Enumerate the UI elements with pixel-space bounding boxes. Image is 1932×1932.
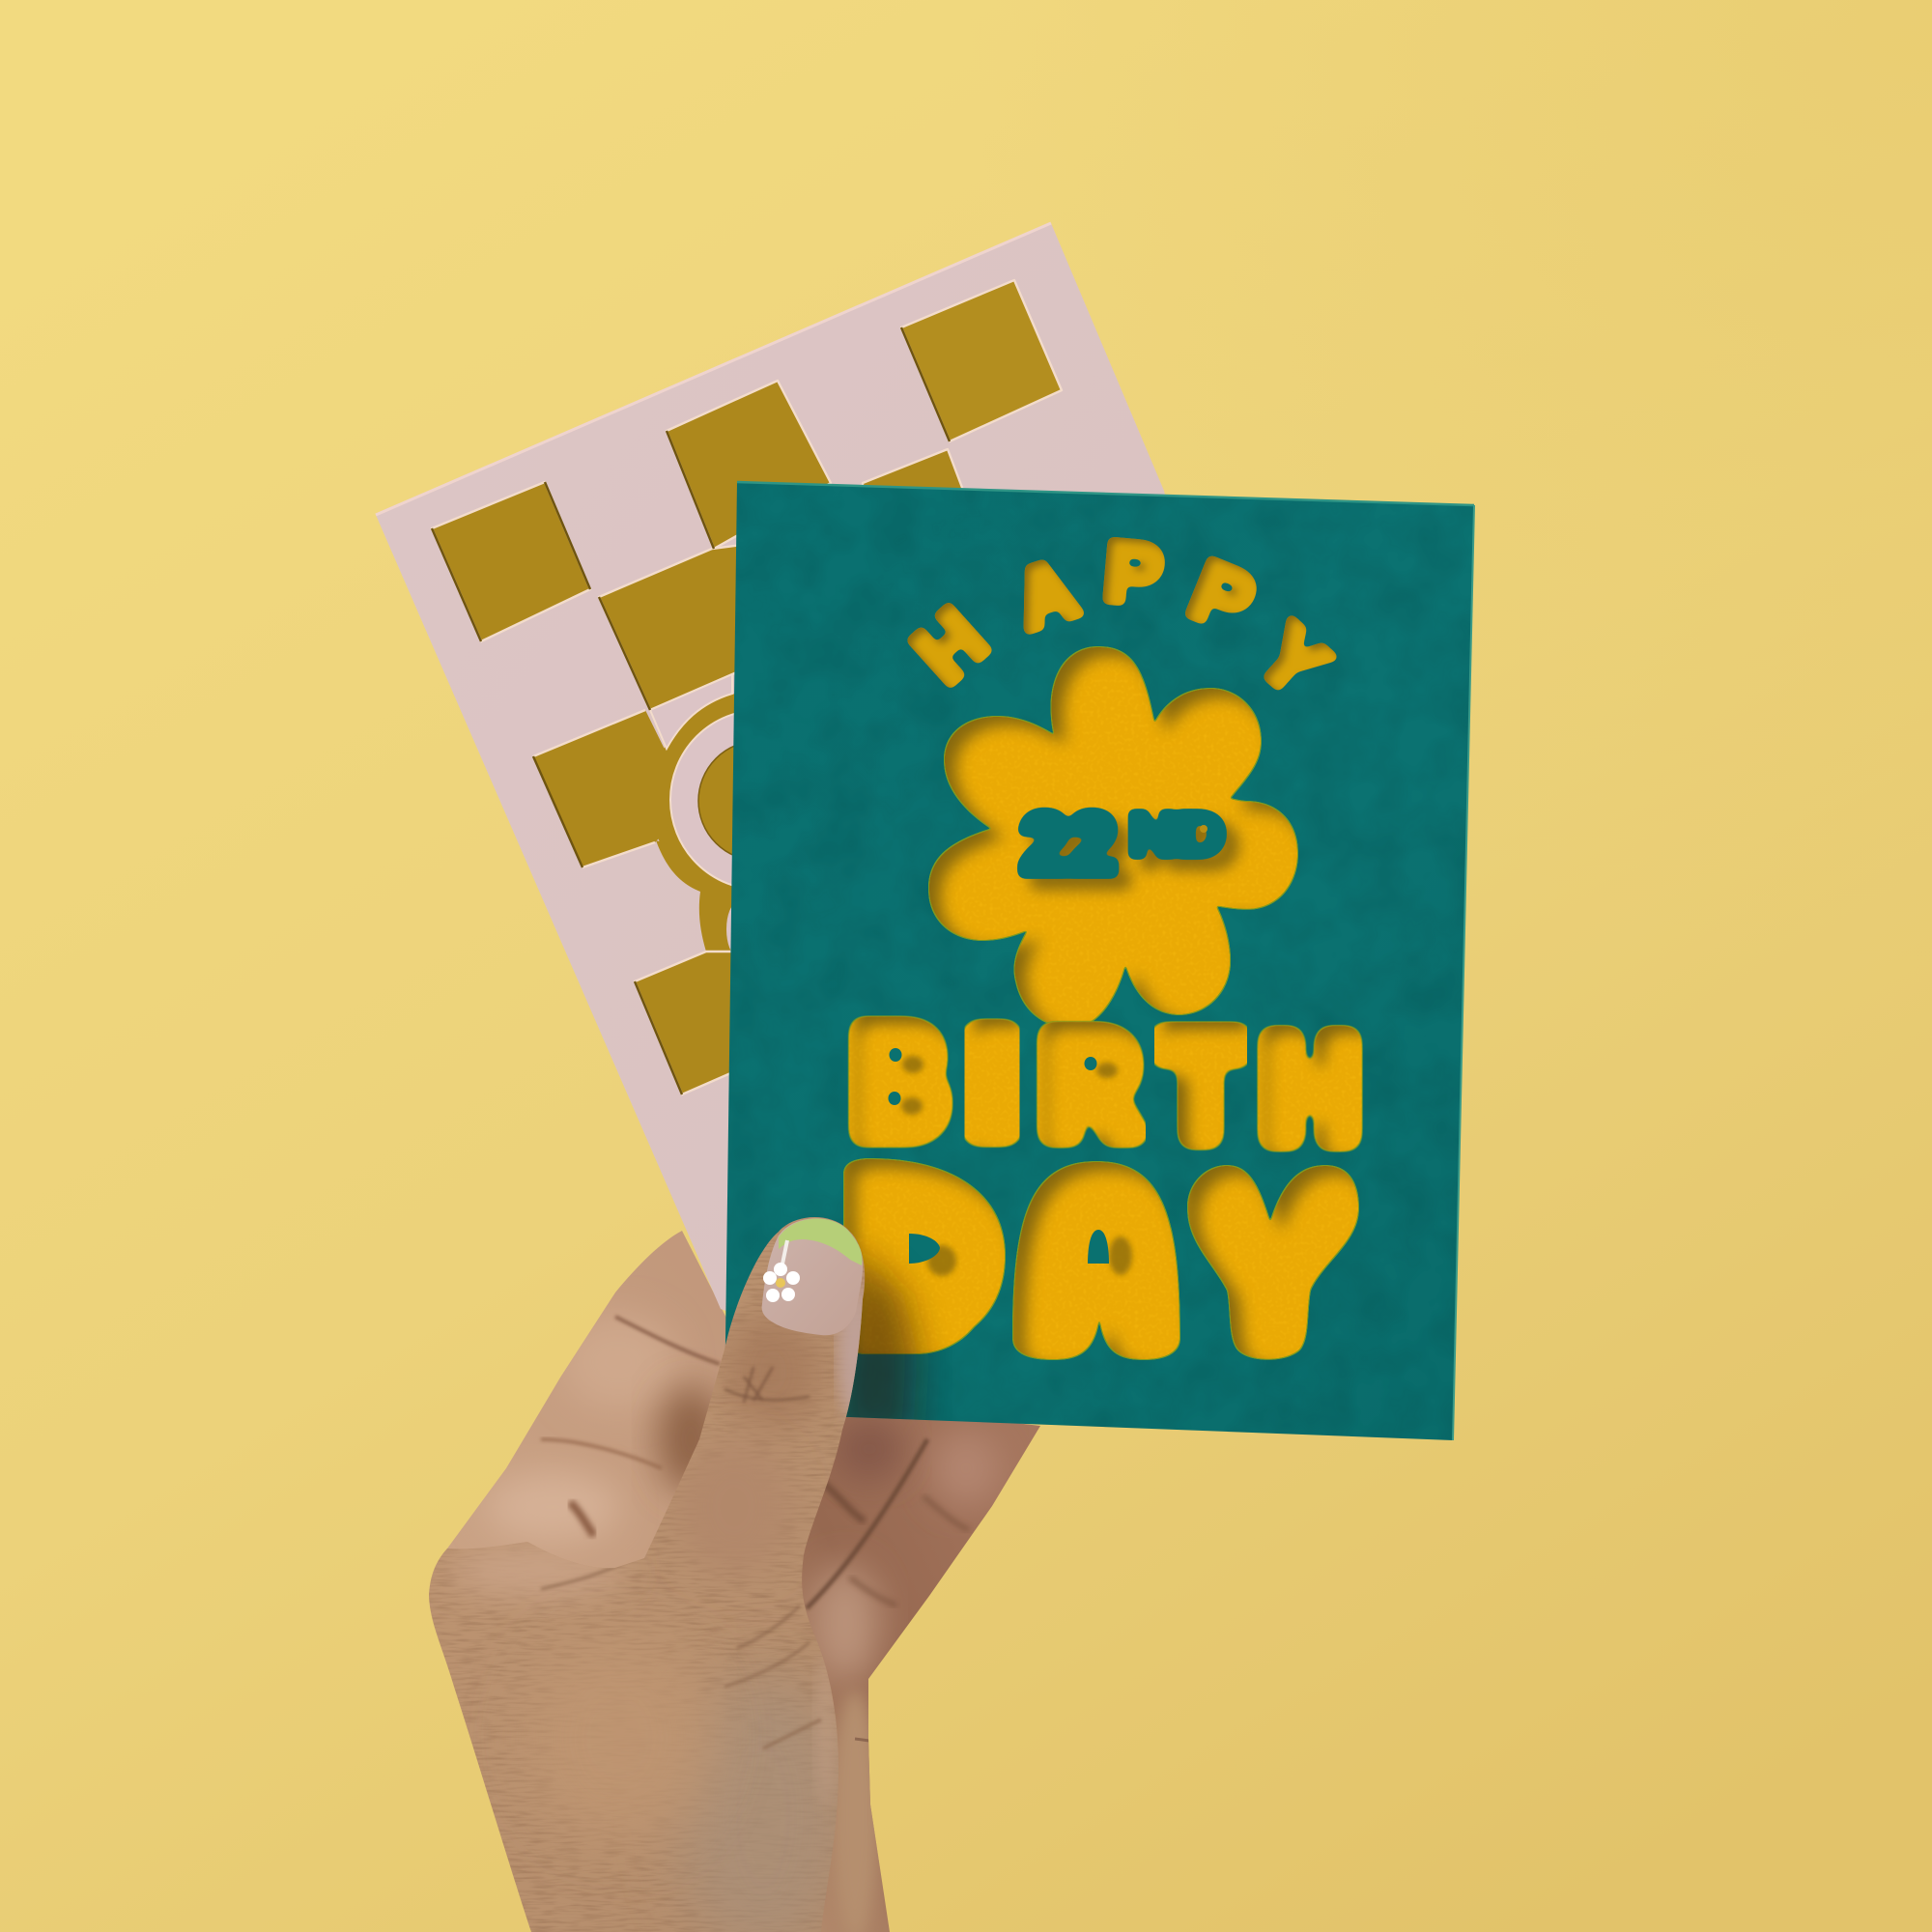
heading: DAY: Y bbox=[1218, 1159, 1328, 1375]
heading: HAPPY arched letters bbox=[896, 525, 1345, 714]
heading: HAPPY arched letters: H bbox=[896, 591, 1004, 700]
card: teal front card bbox=[724, 482, 1474, 1440]
heading: HAPPY arched letters: Y bbox=[1240, 607, 1345, 714]
label: 22ND on flower: 22 bbox=[1021, 798, 1116, 891]
shadow of thumb on card bbox=[831, 1246, 918, 1439]
heading: BIRTH: H bbox=[1264, 1012, 1356, 1166]
heading: HAPPY arched letters: A bbox=[1004, 541, 1087, 647]
index finger and palm fold bbox=[447, 1231, 726, 1569]
flower emblem cut-out on pink card bbox=[651, 691, 869, 952]
heading: BIRTH: R bbox=[1043, 1009, 1136, 1162]
left checker square merging into emblem bbox=[533, 710, 676, 867]
heading: DAY: A bbox=[1040, 1152, 1152, 1373]
heading: BIRTH: T bbox=[1162, 1008, 1239, 1165]
heading: BIRTH: B bbox=[854, 1002, 945, 1162]
thumb wrinkles bbox=[724, 1367, 810, 1403]
thumb nail bbox=[762, 1218, 863, 1335]
right fingers below the card bbox=[802, 1416, 1040, 1932]
label: 22ND on flower bbox=[1021, 798, 1224, 891]
heading: HAPPY arched letters: P bbox=[1101, 525, 1165, 622]
illustration: yellow cut-out flower bbox=[929, 647, 1297, 1028]
skin shading bbox=[449, 1543, 623, 1597]
icon: daisy nail art bbox=[763, 1263, 800, 1302]
heading: HAPPY arched letters: P bbox=[1179, 543, 1265, 650]
gold checker cut-outs bbox=[432, 280, 1062, 1094]
heading: DAY: D bbox=[853, 1148, 982, 1375]
hand: fingers behind the cards bbox=[425, 1217, 1053, 1932]
heading: BIRTH bbox=[854, 1002, 1356, 1166]
cut shadow edges bbox=[432, 327, 950, 1094]
label: 22ND on flower: ND bbox=[1129, 801, 1224, 867]
heading: DAY bbox=[844, 1148, 1358, 1375]
flower emblem rings bbox=[650, 674, 850, 955]
card: pink back card with gold checkers bbox=[376, 223, 1208, 1314]
hand: thumb and back of hand in front of the card bbox=[415, 1198, 879, 1932]
letter counters bbox=[889, 825, 1208, 1276]
pink card paper bbox=[376, 223, 1208, 1314]
heading: BIRTH: I bbox=[969, 1006, 1015, 1161]
